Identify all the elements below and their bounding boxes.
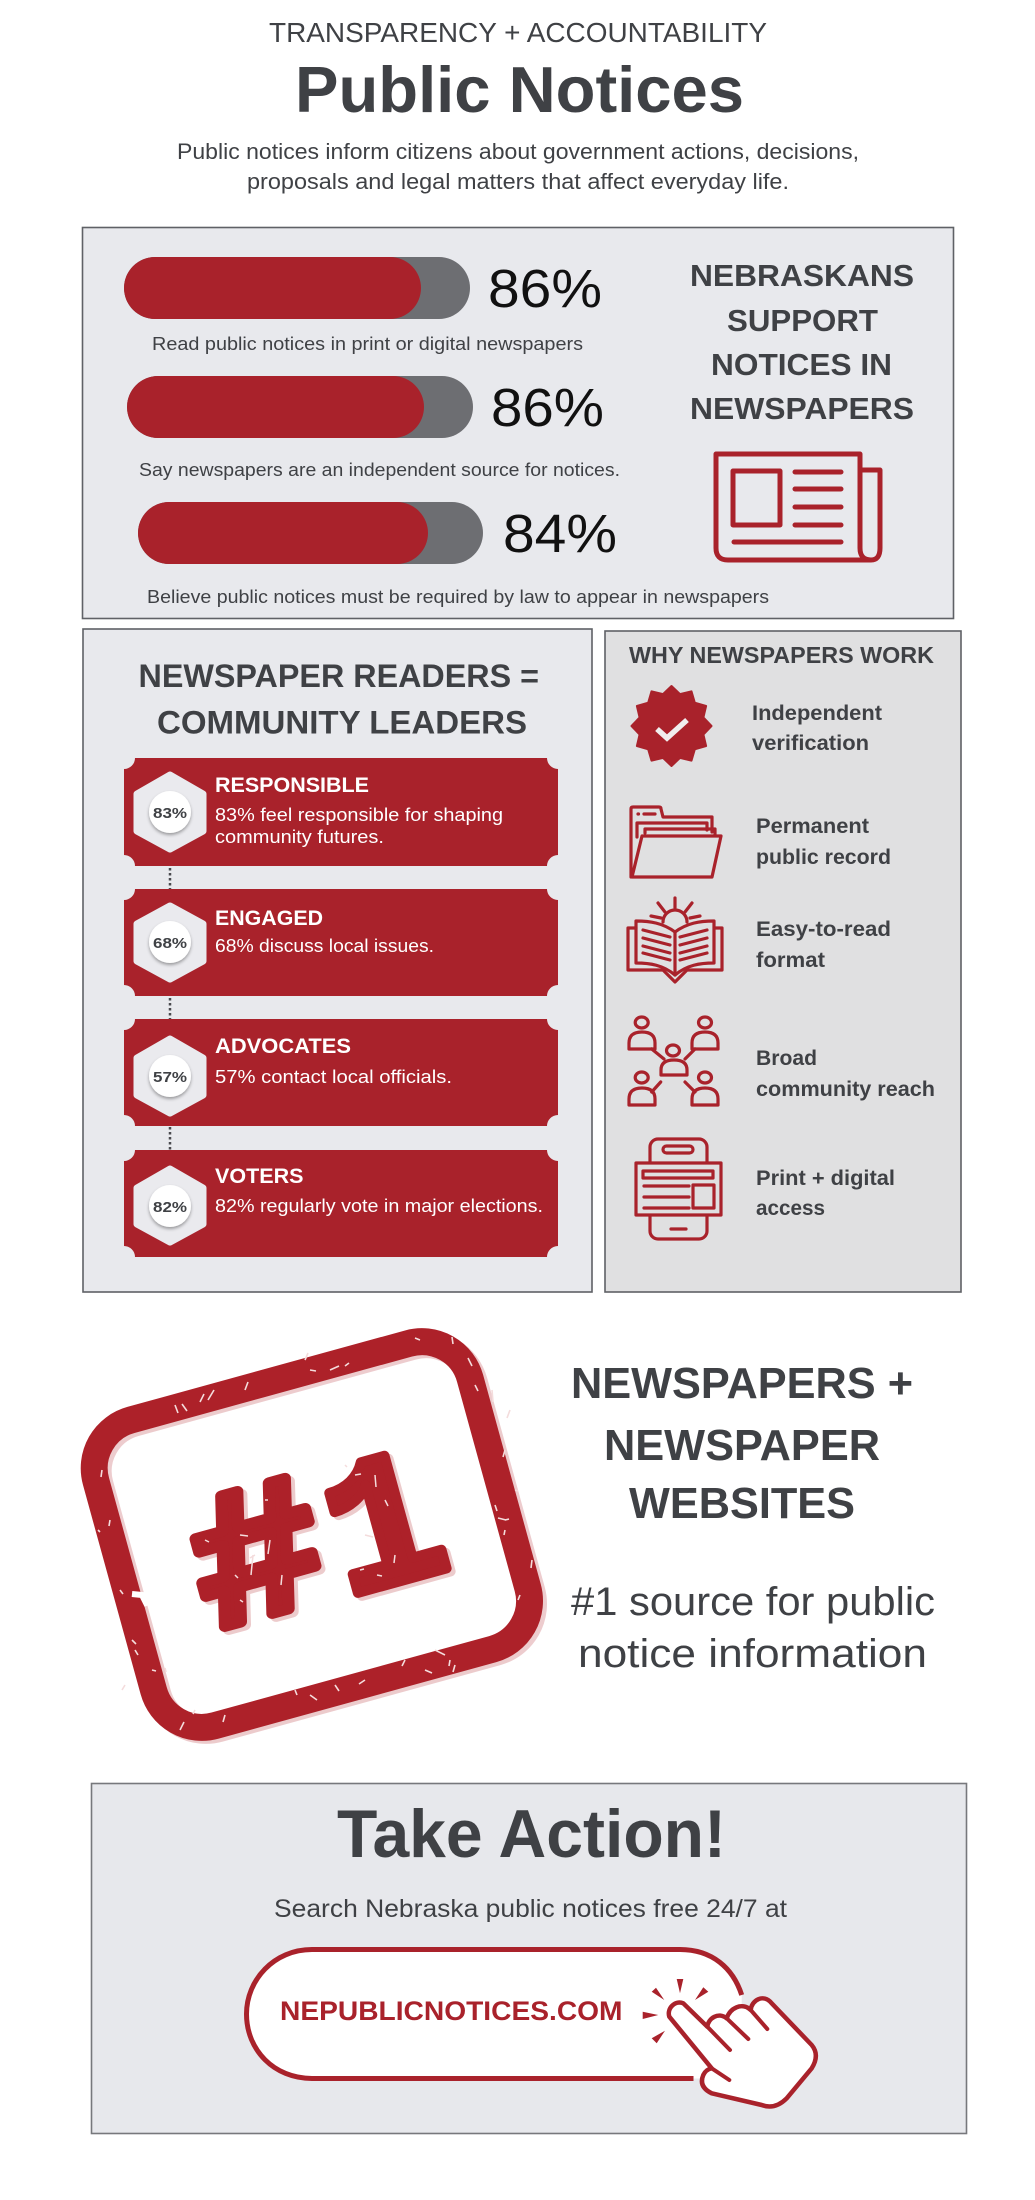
stat bar: 86% independent: Say newspapers are an independent source for notices. <box>139 459 620 480</box>
card: advocates <box>124 1019 558 1126</box>
label: easy-to-read format: Easy-to-read <box>756 918 891 941</box>
panel heading: NOTICES IN <box>711 347 892 382</box>
panel: Nebraskans support notices in newspapers <box>82 228 954 618</box>
callout: newspapers + newspaper websites: WEBSITES <box>629 1479 855 1528</box>
stat bar: 86% read <box>124 257 602 354</box>
card: engaged: 68% discuss local issues. <box>215 936 434 956</box>
connector dots <box>169 853 171 1150</box>
card: advocates: 57% contact local officials. <box>215 1067 452 1087</box>
card: advocates: 57% <box>153 1069 187 1086</box>
callout: newspapers + newspaper websites: NEWSPAPER <box>604 1421 880 1470</box>
label: independent verification: Independent <box>752 702 882 725</box>
panel: newspaper readers = community leaders <box>83 629 592 1292</box>
stamp shadow <box>87 1333 545 1742</box>
label: easy-to-read format <box>756 918 891 972</box>
callout: newspapers + newspaper websites: NEWSPAPERS + <box>571 1359 913 1408</box>
label: broad community reach <box>756 1047 935 1101</box>
label: independent verification: verification <box>752 732 869 755</box>
icon: newspaper <box>716 454 880 560</box>
stat bar: 86% independent <box>127 376 620 480</box>
stat bar: 84% required by law: Believe public notices must be required by law to appear in newspapers <box>147 586 769 607</box>
card: advocates: ADVOCATES <box>215 1035 351 1058</box>
callout: newspapers + newspaper websites: notice information <box>578 1632 927 1676</box>
label: independent verification <box>752 702 882 755</box>
label: permanent public record: public record <box>756 846 891 869</box>
panel heading: WHY NEWSPAPERS WORK <box>629 642 934 668</box>
card: voters: 82% regularly vote in major elections. <box>215 1196 543 1216</box>
panel heading: COMMUNITY LEADERS <box>157 704 527 740</box>
stamp frame and number <box>83 1330 541 1739</box>
call to action button <box>246 1950 816 2106</box>
label: easy-to-read format: format <box>756 949 825 972</box>
icon: community network <box>629 1017 718 1105</box>
eyebrow heading: TRANSPARENCY + ACCOUNTABILITY <box>269 17 767 48</box>
card: responsible <box>124 758 558 866</box>
stamp: #1 <box>83 1330 545 1742</box>
stamp frame and number: 1 <box>303 1415 470 1652</box>
icon: clicking hand <box>643 1979 816 2106</box>
panel: take action <box>92 1784 966 2134</box>
stamp frame and number: # <box>166 1441 351 1687</box>
card: engaged: ENGAGED <box>215 907 323 930</box>
label: broad community reach: Broad <box>756 1047 817 1070</box>
stat bar: 84% required by law: 84% <box>503 504 617 564</box>
card: engaged: 68% <box>153 935 187 952</box>
heading: Take Action! <box>337 1796 726 1872</box>
icon: folder <box>631 807 721 877</box>
icon: verified badge <box>632 686 712 766</box>
card: voters: 82% <box>153 1199 187 1216</box>
callout: newspapers + newspaper websites <box>571 1359 935 1676</box>
card: voters: VOTERS <box>215 1165 304 1188</box>
card: engaged <box>124 889 558 996</box>
panel heading <box>138 658 539 740</box>
header <box>177 17 859 194</box>
stamp shadow: 1 <box>307 1418 474 1655</box>
stat bar: 84% required by law <box>138 502 769 607</box>
label: print + digital access: access <box>756 1197 825 1220</box>
panel heading: NEBRASKANS <box>690 258 914 293</box>
stat bar: 86% independent: 86% <box>491 378 604 438</box>
callout: newspapers + newspaper websites: #1 source for public <box>571 1580 935 1624</box>
label: print + digital access <box>756 1167 895 1220</box>
card: responsible: RESPONSIBLE <box>215 774 369 797</box>
card: responsible: 83% <box>153 805 187 822</box>
stat bar: 86% read: Read public notices in print or digital newspapers <box>152 333 583 354</box>
card: responsible: community futures. <box>215 827 384 847</box>
intro text <box>177 139 859 194</box>
icon: open book with sun <box>628 898 722 982</box>
stamp scratches <box>98 1337 532 1730</box>
icon: phone with newspaper <box>636 1139 721 1239</box>
panel heading: SUPPORT <box>727 303 878 338</box>
panel: why newspapers work <box>605 631 961 1292</box>
stat bar: 86% read: 86% <box>488 259 602 319</box>
panel heading: NEWSPAPERS <box>690 391 914 426</box>
search text: Search Nebraska public notices free 24/7 at <box>274 1895 787 1923</box>
title: Public Notices <box>295 53 744 126</box>
panel heading <box>690 258 914 426</box>
intro text: proposals and legal matters that affect everyday life. <box>247 169 789 194</box>
label: permanent public record <box>756 815 891 869</box>
card: voters <box>124 1150 558 1257</box>
intro text: Public notices inform citizens about government actions, decisions, <box>177 139 859 164</box>
label: broad community reach: community reach <box>756 1078 935 1101</box>
label: print + digital access: Print + digital <box>756 1167 895 1190</box>
label: permanent public record: Permanent <box>756 815 869 838</box>
card: responsible: 83% feel responsible for shaping <box>215 805 503 825</box>
stamp shadow: # <box>170 1444 355 1690</box>
panel heading: NEWSPAPER READERS = <box>138 658 539 694</box>
stamp gap <box>132 1594 154 1603</box>
call to action button: NEPUBLICNOTICES.COM <box>280 1996 622 2026</box>
